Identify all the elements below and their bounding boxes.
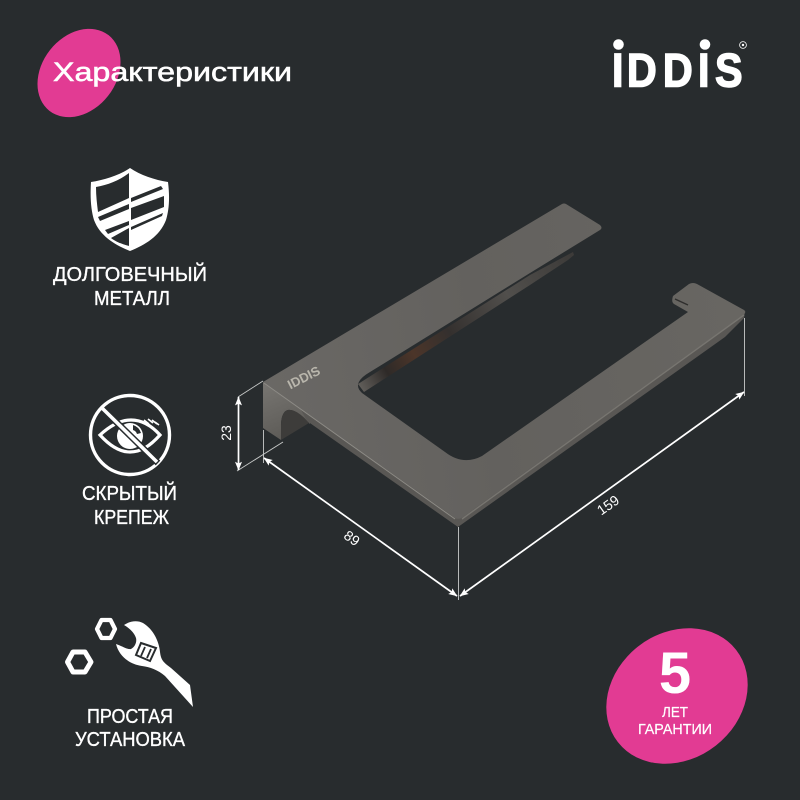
wrench	[116, 621, 193, 707]
warranty label: ГАРАНТИИ	[638, 722, 712, 738]
dimension arrow: width	[264, 458, 457, 596]
dimension value: 89: 89	[341, 527, 363, 549]
warranty badge	[579, 600, 775, 792]
dimension extension lines	[237, 318, 744, 600]
logo i dots	[613, 39, 710, 50]
warranty label: ЛЕТ	[662, 705, 688, 721]
dimension value: 159: 159	[594, 492, 622, 518]
label: hidden fastening: СКРЫТЫЙ	[82, 481, 177, 505]
feature: easy installation	[68, 620, 193, 751]
large nut	[68, 652, 91, 672]
heading pink blob	[20, 12, 138, 134]
feature: durable metal	[53, 168, 207, 310]
label: durable metal: ДОЛГОВЕЧНЫЙ	[53, 262, 207, 286]
product lower lip	[300, 312, 745, 527]
label: hidden fastening: КРЕПЕЖ	[94, 507, 169, 529]
warranty pink blob	[579, 600, 775, 792]
small nut	[97, 620, 115, 638]
dimension arrow: height	[238, 397, 240, 470]
label: easy installation: УСТАНОВКА	[75, 729, 186, 751]
dimensions	[218, 318, 744, 600]
heading: characteristics	[20, 12, 292, 134]
warranty number: 5	[659, 641, 691, 706]
label: easy installation: ПРОСТАЯ	[87, 706, 173, 728]
heading text: Характеристики	[53, 57, 292, 87]
product lit edges	[264, 299, 744, 519]
registered mark	[740, 42, 746, 48]
dimension value: 23: 23	[218, 425, 234, 441]
product: toilet paper holder	[263, 204, 745, 527]
dimension arrow: length	[460, 392, 744, 596]
brand logo	[612, 39, 746, 97]
feature: hidden fastening	[82, 396, 177, 529]
logo wordmark: IDDIS	[612, 45, 743, 97]
wrench adjuster	[136, 643, 156, 661]
product engraved logo: IDDIS	[285, 363, 323, 392]
icon: nuts and wrench	[68, 620, 193, 707]
product top face	[263, 204, 745, 519]
product end face	[263, 382, 310, 440]
icon: shield	[91, 168, 169, 251]
product inner wall of upper arm	[358, 252, 574, 392]
label: durable metal: МЕТАЛЛ	[94, 288, 170, 310]
icon: crossed-out eye	[90, 396, 170, 474]
